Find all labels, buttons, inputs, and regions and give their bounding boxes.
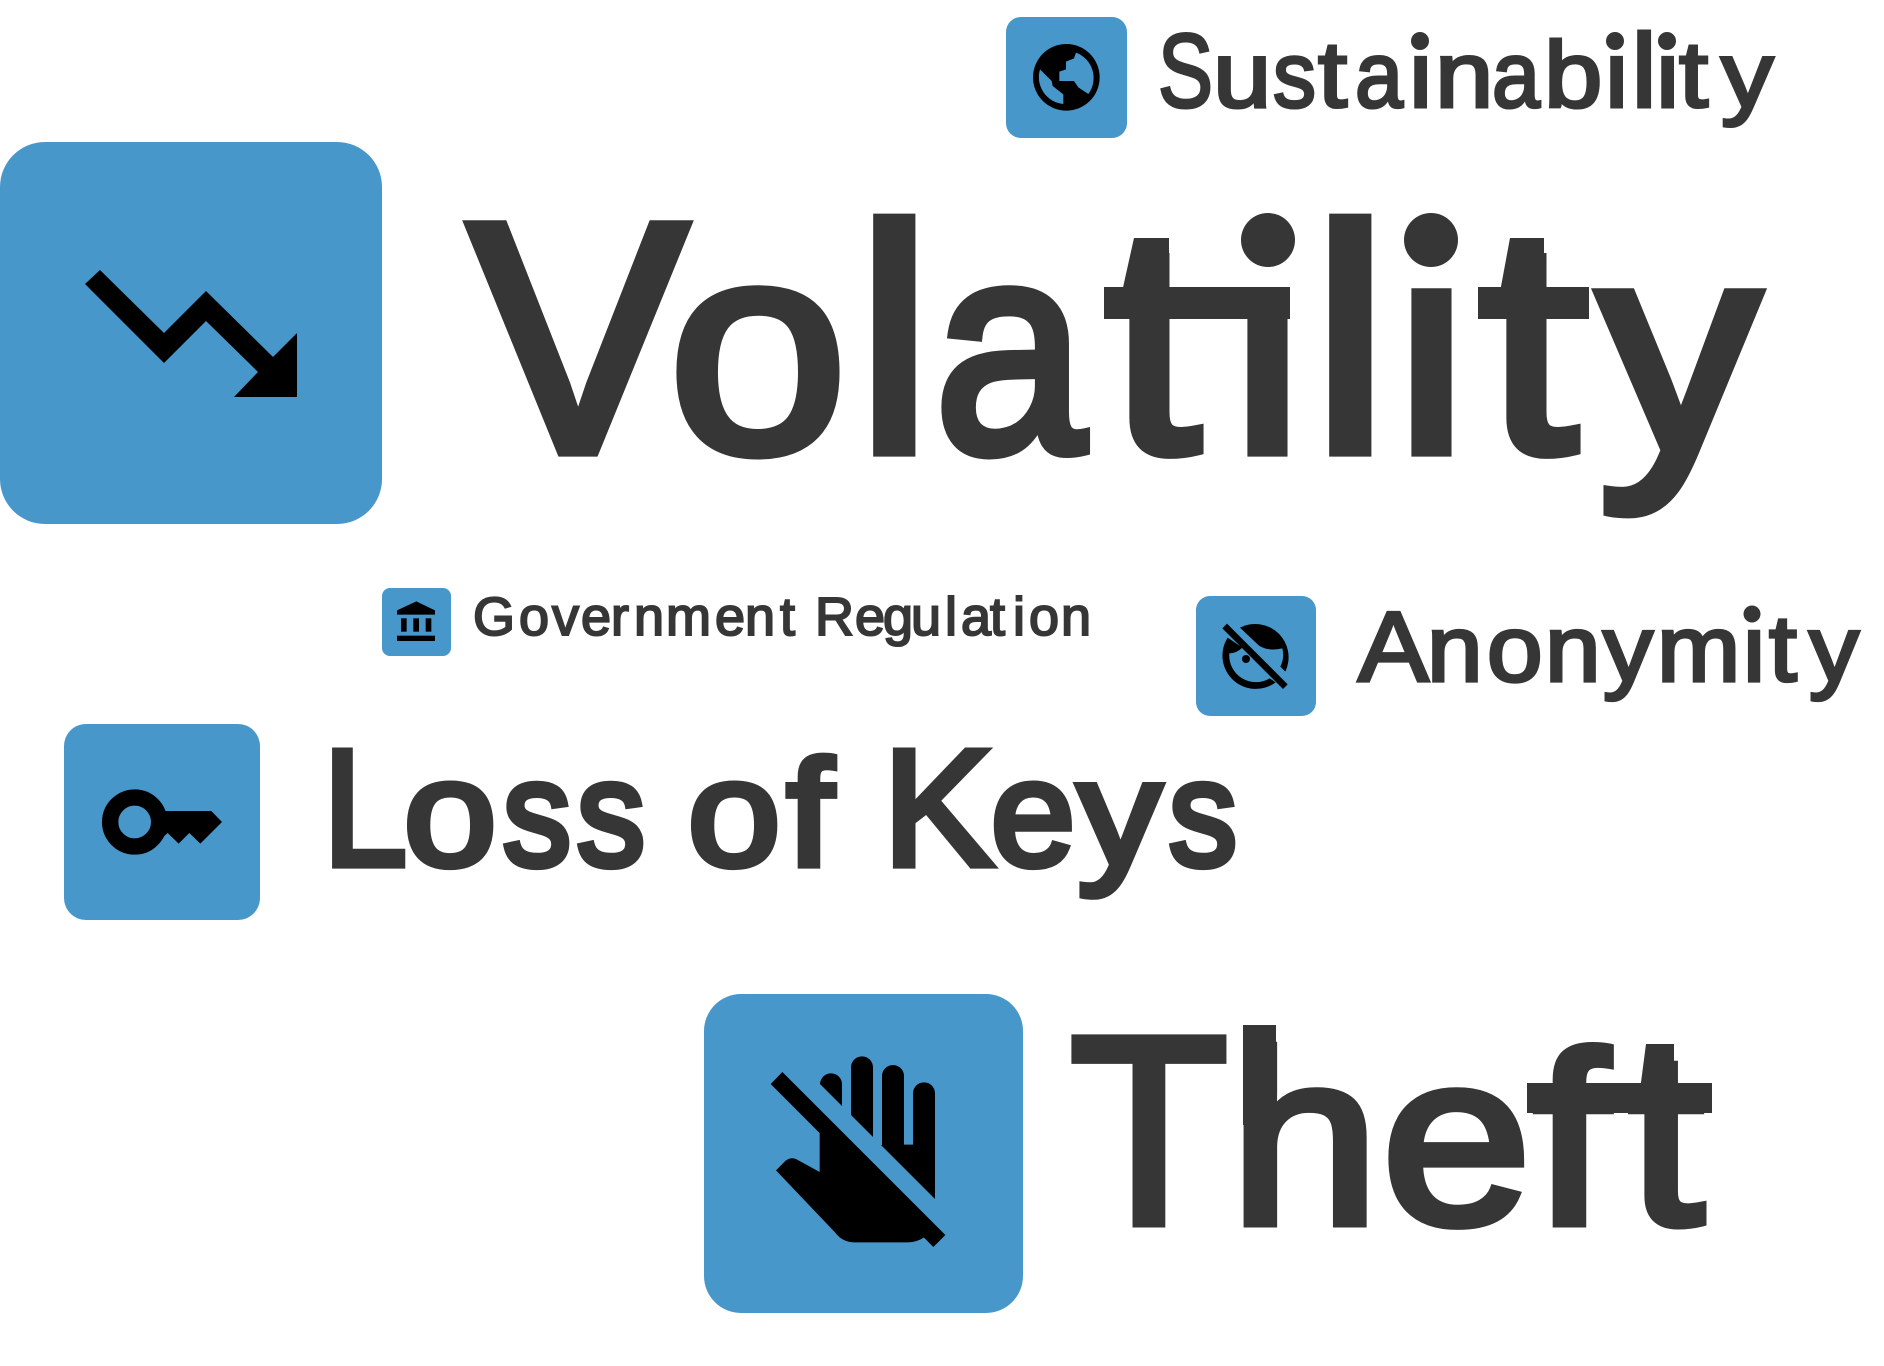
label: Sustainability: i [1605, 23, 1628, 128]
icon: falling arrow tile [0, 142, 382, 524]
label: Loss of Keys: s [1169, 729, 1237, 897]
label: Sustainability: y [1721, 23, 1774, 128]
label: Volatility: l [856, 162, 932, 519]
label: Volatility: y [1599, 182, 1759, 516]
icon: government building tile [382, 588, 451, 656]
item: Theft [704, 981, 1712, 1313]
label: Loss of Keys: f [787, 729, 834, 897]
label: Loss of Keys: y [1078, 729, 1161, 897]
label: Sustainability: t [1318, 23, 1347, 128]
item: Government Regulation [382, 587, 1091, 656]
item: Sustainability [1006, 12, 1774, 138]
label: Loss of Keys: o [688, 729, 780, 897]
icon: crossed hand tile [704, 994, 1023, 1313]
label: Volatility: a [935, 182, 1087, 515]
label: Sustainability: l [1631, 12, 1657, 130]
label: Sustainability: t [1679, 23, 1708, 128]
label: Sustainability: a [1355, 23, 1404, 128]
item: Volatility [0, 142, 1759, 524]
item: Loss of Keys [64, 715, 1237, 920]
label: Volatility: t [1488, 182, 1578, 515]
label: Volatility: i [1396, 182, 1467, 515]
label: Volatility: l [1312, 162, 1388, 519]
label: Sustainability: S [1158, 12, 1213, 130]
icon: globe tile [1006, 17, 1127, 138]
label: Sustainability [1158, 12, 1774, 130]
label: Loss of Keys: K [883, 715, 993, 900]
label: Sustainability: i [1656, 23, 1679, 128]
label: Volatility: i [1232, 182, 1303, 515]
label: Sustainability: n [1435, 23, 1493, 128]
label: Volatility: V [469, 155, 689, 521]
label: Loss of Keys: o [404, 729, 496, 897]
icon: key tile [64, 724, 260, 920]
label: Theft: f [1534, 1003, 1609, 1275]
label: Loss of Keys: s [577, 729, 645, 897]
label: Theft: h [1230, 1003, 1379, 1275]
label: Sustainability: i [1409, 23, 1432, 128]
label: Volatility: t [1111, 182, 1201, 515]
label: Theft: T [1070, 981, 1228, 1280]
label: Loss of Keys: e [991, 729, 1075, 897]
label: Loss of Keys: L [323, 715, 407, 900]
icon: anonymous face tile [1196, 596, 1316, 716]
label: Sustainability: s [1273, 23, 1316, 128]
label: Sustainability: u [1213, 23, 1271, 128]
label: Theft: t [1629, 1003, 1704, 1275]
label: Sustainability: a [1492, 23, 1541, 128]
label: Theft: e [1382, 1003, 1531, 1275]
label: Volatility: o [669, 182, 847, 515]
item: Anonymity [1196, 591, 1859, 716]
label: Sustainability: b [1544, 23, 1602, 128]
label: Volatility [469, 155, 1759, 521]
label: Theft [1070, 981, 1712, 1280]
label: Loss of Keys: s [503, 729, 571, 897]
label: Government Regulation: Government Regulation [473, 587, 1091, 647]
label: Anonymity: Anonymity [1358, 591, 1859, 702]
